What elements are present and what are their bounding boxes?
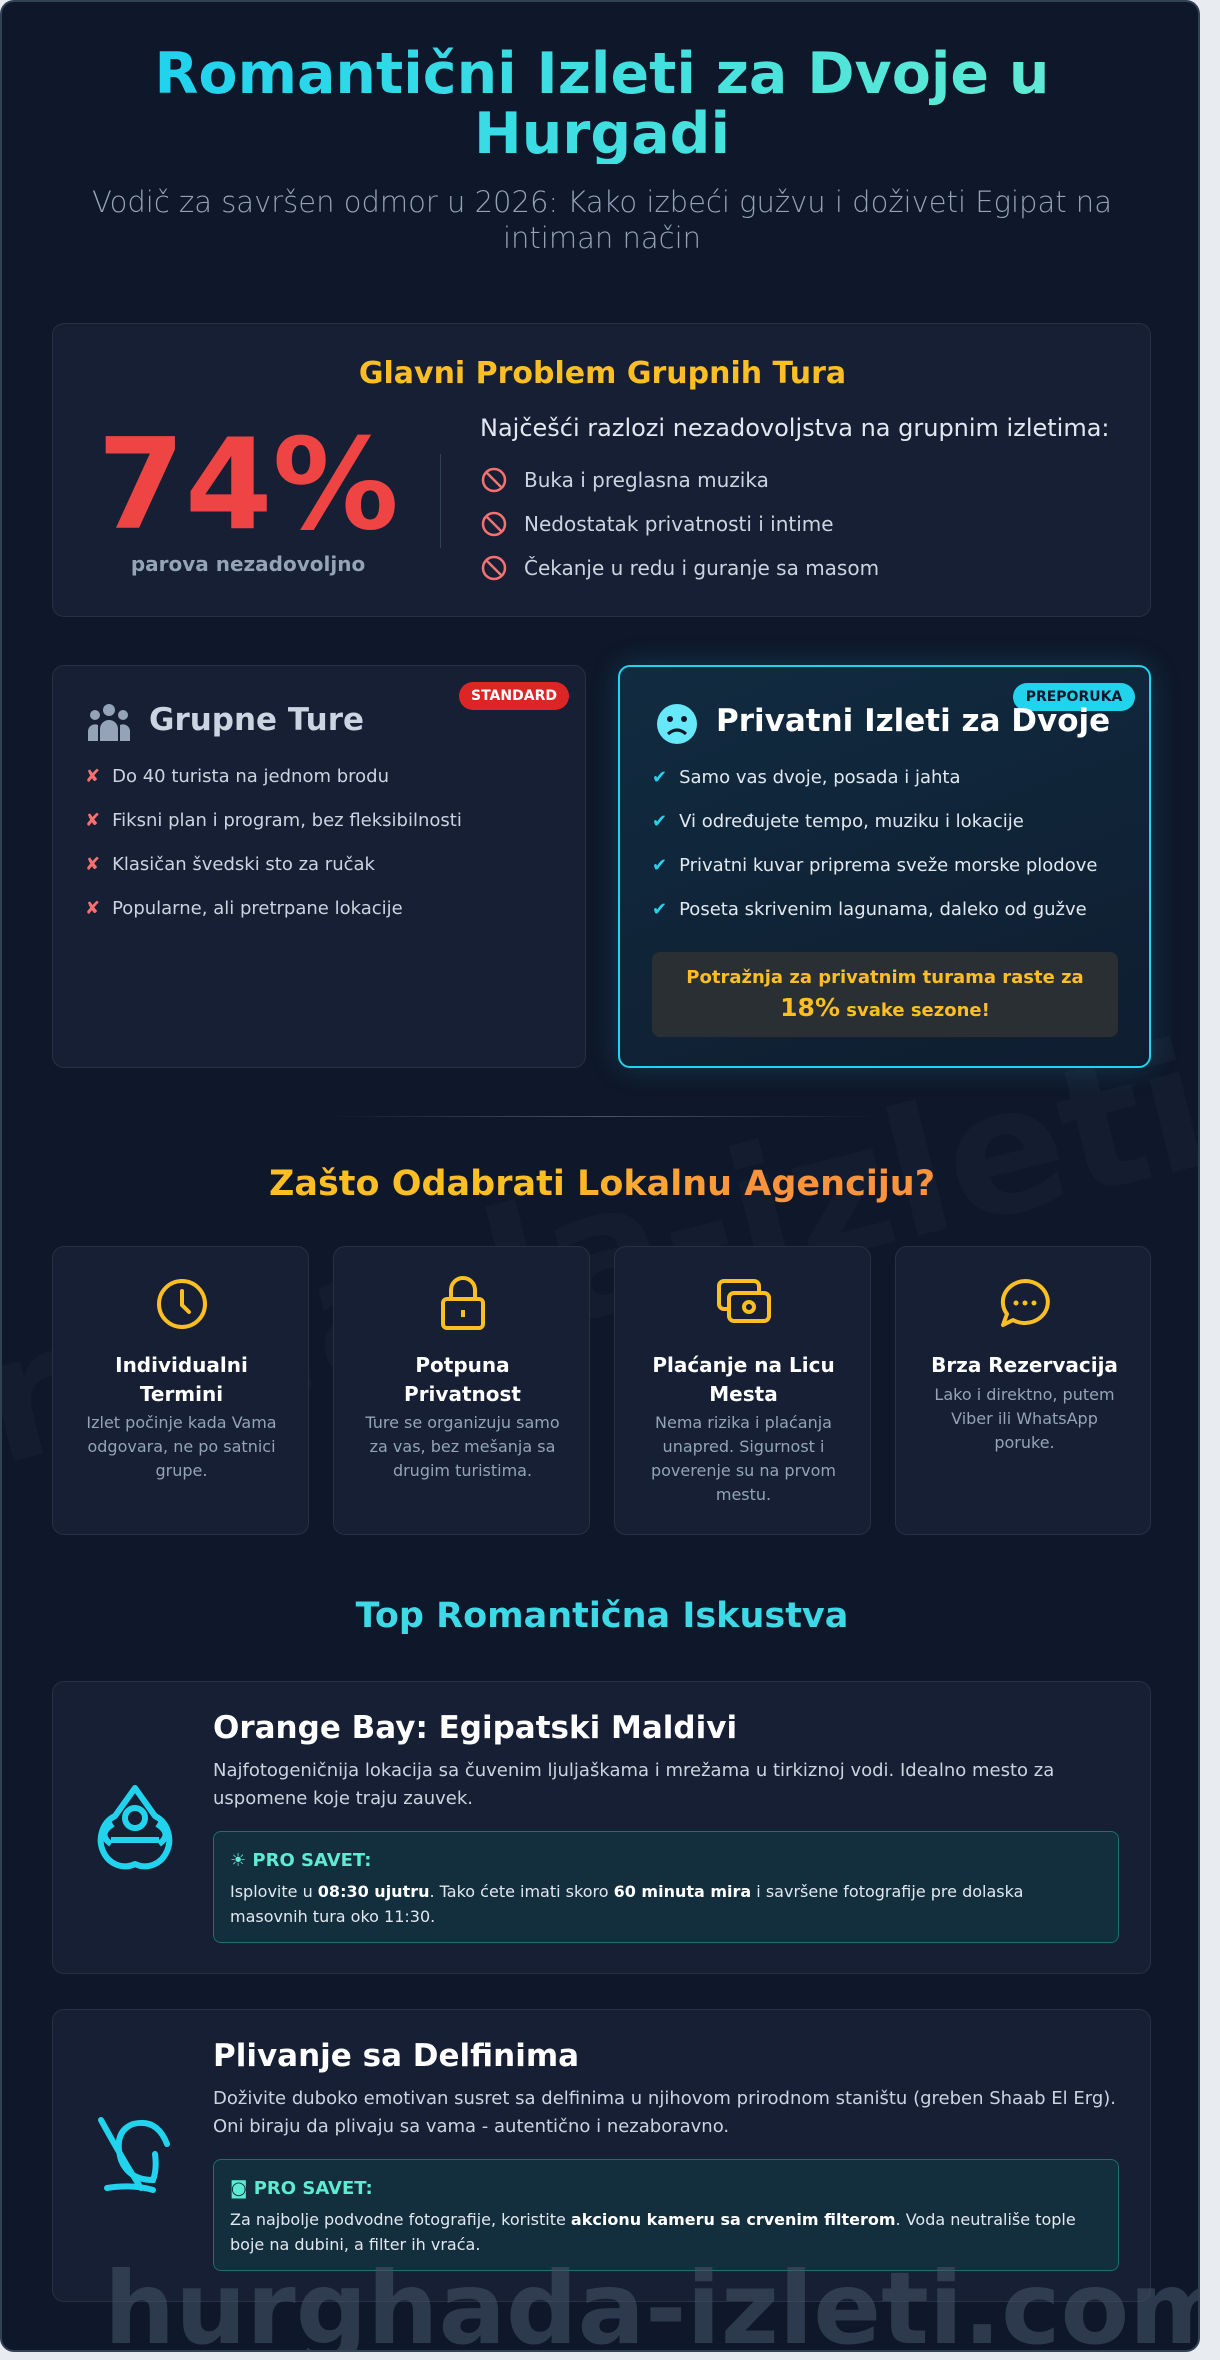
experience card: dolphins bbox=[52, 2009, 1151, 2302]
icon: people bbox=[88, 704, 130, 741]
reasons list: Nedostatak privatnosti i intime bbox=[524, 512, 834, 536]
reasons list: Najčešći razlozi nezadovoljstva na grupnim izletima: bbox=[480, 414, 1110, 442]
list: ✘ Do 40 turista na jednom brodu bbox=[85, 766, 389, 787]
icon: snorkel mask bbox=[98, 1785, 172, 1870]
list bbox=[652, 767, 1097, 920]
feature card 2 bbox=[333, 1246, 590, 1535]
list bbox=[85, 766, 462, 919]
feature card 2: Privatnost bbox=[404, 1382, 521, 1406]
heading: why local agency: Zašto Odabrati Lokalnu Agenciju? bbox=[269, 1164, 935, 1204]
title bbox=[2, 44, 1202, 164]
callout: 18% svake sezone! bbox=[780, 993, 990, 1022]
heading: top experiences: Top Romantična Iskustva bbox=[356, 1596, 848, 1636]
icon: chat bbox=[1000, 1279, 1050, 1328]
icon: dolphin bbox=[98, 2117, 170, 2193]
list: ✔ Poseta skrivenim lagunama, daleko od gužve bbox=[652, 899, 1087, 920]
list: ✘ Fiksni plan i program, bez fleksibilnosti bbox=[85, 810, 462, 831]
icon: face bbox=[657, 704, 697, 744]
feature card 3: Plaćanje na Licu bbox=[652, 1353, 835, 1377]
reasons list bbox=[480, 414, 1110, 580]
list: ✔ Vi određujete tempo, muziku i lokacije bbox=[652, 811, 1024, 832]
heading: Glavni Problem Grupnih Tura bbox=[359, 356, 846, 391]
heading: why local agency bbox=[2, 1164, 1202, 1204]
panel: group tours bbox=[52, 665, 586, 1068]
subtitle: Vodič za savršen odmor u 2026: Kako izbeći gužvu i doživeti Egipat na intiman način bbox=[92, 185, 1112, 255]
stat 74%: 74% bbox=[97, 411, 399, 558]
callout bbox=[652, 952, 1118, 1037]
feature card 1: Termini bbox=[140, 1382, 223, 1406]
feature card 1: Izlet počinje kada Vama odgovara, ne po satnici grupe. bbox=[86, 1413, 277, 1480]
pro tip: Za najbolje podvodne fotografije, koristite akcionu kameru sa crvenim filterom. Voda neutrališe tople boje na dubini, a filter ih vraća. bbox=[230, 2210, 1076, 2254]
badge standard: STANDARD bbox=[471, 688, 557, 704]
title: Hurgadi bbox=[474, 101, 730, 167]
feature card 1: Individualni bbox=[115, 1353, 248, 1377]
feature card 2: Ture se organizuju samo za vas, bez mešanja sa drugim turistima. bbox=[365, 1413, 560, 1480]
feature card 2: Potpuna bbox=[415, 1353, 510, 1377]
reasons list: Buka i preglasna muzika bbox=[524, 468, 769, 492]
badge standard bbox=[459, 682, 569, 710]
pro tip bbox=[213, 1831, 1119, 1943]
title: Romantični Izleti za Dvoje u bbox=[155, 41, 1049, 107]
title: Orange Bay: Egipatski Maldivi bbox=[213, 1710, 737, 1746]
feature card 1 bbox=[52, 1246, 309, 1535]
icon: money bbox=[717, 1279, 771, 1323]
stat label: parova nezadovoljno bbox=[131, 552, 365, 576]
list: ✔ Samo vas dvoje, posada i jahta bbox=[652, 767, 960, 788]
list: ✘ Klasičan švedski sto za ručak bbox=[85, 854, 375, 875]
list: ✔ Privatni kuvar priprema sveže morske plodove bbox=[652, 855, 1097, 876]
feature card 4: Brza Rezervacija bbox=[931, 1353, 1118, 1377]
list: ✘ Popularne, ali pretrpane lokacije bbox=[85, 898, 403, 919]
panel: private tours bbox=[618, 665, 1151, 1068]
title: Plivanje sa Delfinima bbox=[213, 2038, 579, 2074]
heading: Privatni Izleti za Dvoje bbox=[716, 703, 1110, 739]
feature card 4: Lako i direktno, putem Viber ili WhatsApp poruke. bbox=[934, 1385, 1115, 1452]
pro tip: ◙ PRO SAVET: bbox=[230, 2178, 373, 2199]
icon: clock bbox=[157, 1279, 207, 1329]
pro tip bbox=[213, 2159, 1119, 2271]
description: Doživite duboko emotivan susret sa delfinima u njihovom prirodnom staništu (greben Shaab El Erg). Oni biraju da plivaju sa vama - autentično i nezaboravno. bbox=[213, 2088, 1116, 2137]
callout: Potražnja za privatnim turama raste za bbox=[686, 967, 1084, 988]
pro tip: ☀ PRO SAVET: bbox=[230, 1850, 371, 1871]
feature card 3: Nema rizika i plaćanja unapred. Sigurnost i poverenje su na prvom mestu. bbox=[651, 1413, 836, 1504]
badge preporuka: PREPORUKA bbox=[1026, 689, 1122, 705]
feature card 3: Mesta bbox=[709, 1382, 778, 1406]
feature card 4 bbox=[895, 1246, 1151, 1535]
feature card 3 bbox=[614, 1246, 871, 1535]
icon: lock bbox=[441, 1276, 485, 1330]
reasons list: Čekanje u redu i guranje sa masom bbox=[524, 556, 879, 580]
badge preporuka bbox=[1013, 683, 1135, 711]
heading: Grupne Ture bbox=[149, 702, 364, 738]
description: Najfotogeničnija lokacija sa čuvenim ljuljaškama i mrežama u tirkiznoj vodi. Idealno mesto za uspomene koje traju zauvek. bbox=[213, 1760, 1054, 1809]
experience card: orange bay bbox=[52, 1681, 1151, 1974]
pro tip: Isplovite u 08:30 ujutru. Tako ćete imati skoro 60 minuta mira i savršene fotografije pre dolaska masovnih tura oko 11:30. bbox=[230, 1882, 1023, 1926]
panel: main problem bbox=[52, 323, 1151, 617]
